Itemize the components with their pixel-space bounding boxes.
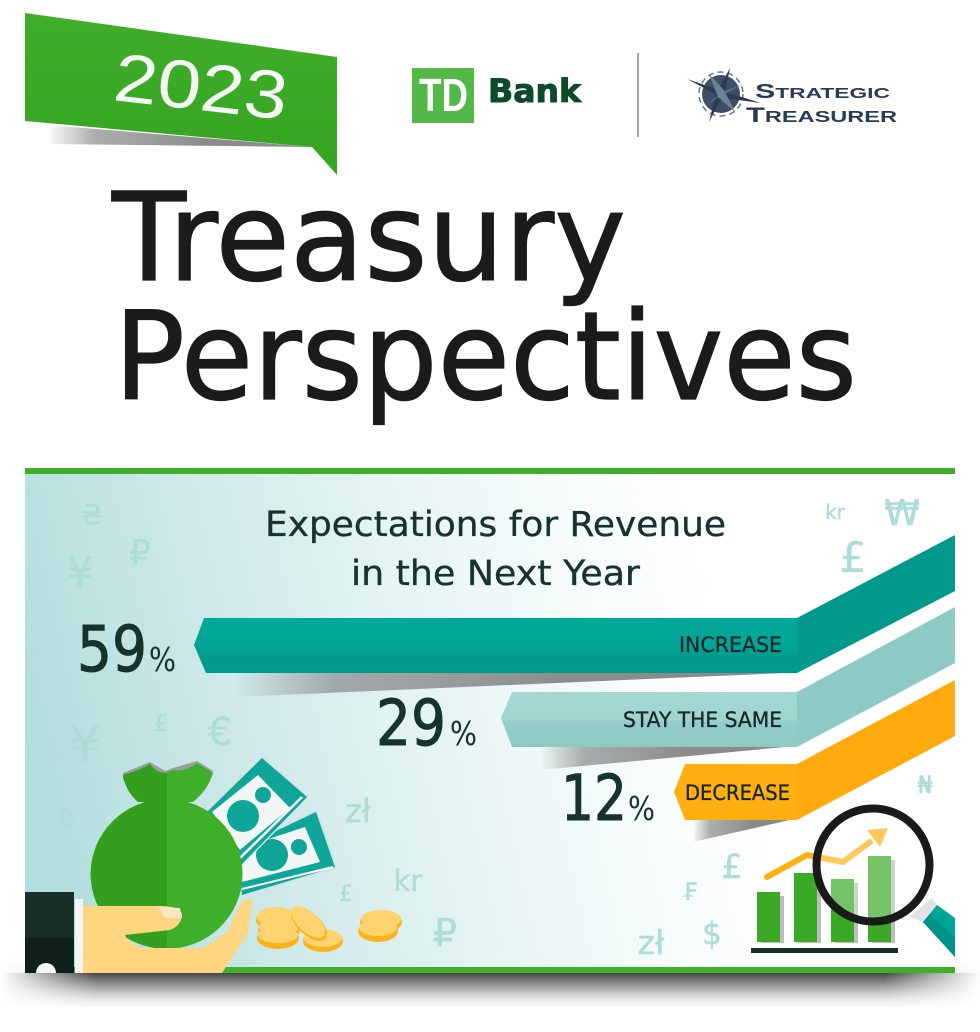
currency symbols background: ¥ — [69, 715, 101, 773]
currency symbols background: £ — [339, 882, 353, 907]
icon: money bag — [90, 761, 242, 949]
heading: in the Next Year — [351, 554, 641, 594]
currency symbols background: € — [208, 710, 232, 754]
currency symbols background: ¥ — [67, 548, 93, 597]
currency symbols background: $ — [702, 916, 722, 952]
currency symbols background: kr — [394, 864, 422, 898]
icon: gold coins — [256, 901, 402, 952]
bar: stay the same 29% — [376, 607, 955, 770]
currency symbols background: ₩ — [884, 493, 920, 534]
currency symbols background: kr — [825, 500, 846, 524]
divider between logos — [637, 53, 639, 137]
bar: decrease 12%: DECREASE — [685, 781, 790, 805]
logo: TD Bank: Bank — [488, 72, 582, 110]
bar: increase 59%: INCREASE — [679, 633, 782, 657]
chart bars — [751, 856, 898, 953]
currency symbols background: £ — [722, 847, 742, 886]
heading — [265, 505, 726, 594]
currency symbols background: ₴ — [81, 498, 103, 531]
magnifier lens — [816, 808, 930, 922]
panel: revenue expectations — [25, 468, 955, 973]
currency symbols background: ₽ — [129, 533, 151, 573]
logo: TD Bank: TD — [419, 69, 468, 121]
magnifier handle — [909, 898, 955, 957]
wordmark: S TRATEGIC — [755, 81, 890, 103]
currency symbols background: ₿ — [58, 807, 74, 832]
currency symbols background: ₦ — [917, 771, 933, 799]
panel shadow — [0, 957, 980, 1007]
value: % — [149, 640, 176, 679]
currency symbols background: zł — [345, 792, 372, 830]
title: Perspectives — [114, 286, 857, 428]
heading: Expectations for Revenue — [265, 505, 726, 545]
title — [111, 167, 857, 428]
logo: Strategic Treasurer: T REASURER — [746, 104, 898, 127]
trend arrow — [767, 828, 888, 877]
banner year: 2023 — [110, 39, 292, 135]
bill front — [206, 754, 309, 868]
value: % — [450, 714, 477, 753]
currency symbols background — [58, 493, 933, 962]
value: 59 — [77, 613, 147, 686]
value: 29 — [376, 687, 446, 760]
currency symbols background: £ — [154, 712, 168, 737]
icon: bar chart with magnifier — [751, 808, 955, 957]
value: 12 — [561, 762, 627, 835]
value: % — [628, 789, 655, 828]
logo: TD Bank — [412, 68, 582, 123]
icon: money bills — [206, 754, 337, 897]
currency symbols background: £ — [840, 533, 866, 582]
currency symbols background: ₽ — [433, 911, 457, 955]
currency symbols background: zł — [638, 923, 665, 962]
currency symbols background: ₣ — [682, 878, 698, 906]
icon: compass star — [687, 68, 761, 122]
bar: decrease 12% — [561, 680, 955, 842]
title: Treasury — [111, 167, 626, 309]
bill back — [235, 809, 337, 897]
bar: increase 59% — [77, 535, 955, 697]
banner: 2023 — [25, 13, 337, 175]
icon: hand and cuff — [25, 892, 253, 973]
logo: Strategic Treasurer — [687, 68, 898, 127]
bar: stay the same 29%: STAY THE SAME — [623, 708, 782, 732]
